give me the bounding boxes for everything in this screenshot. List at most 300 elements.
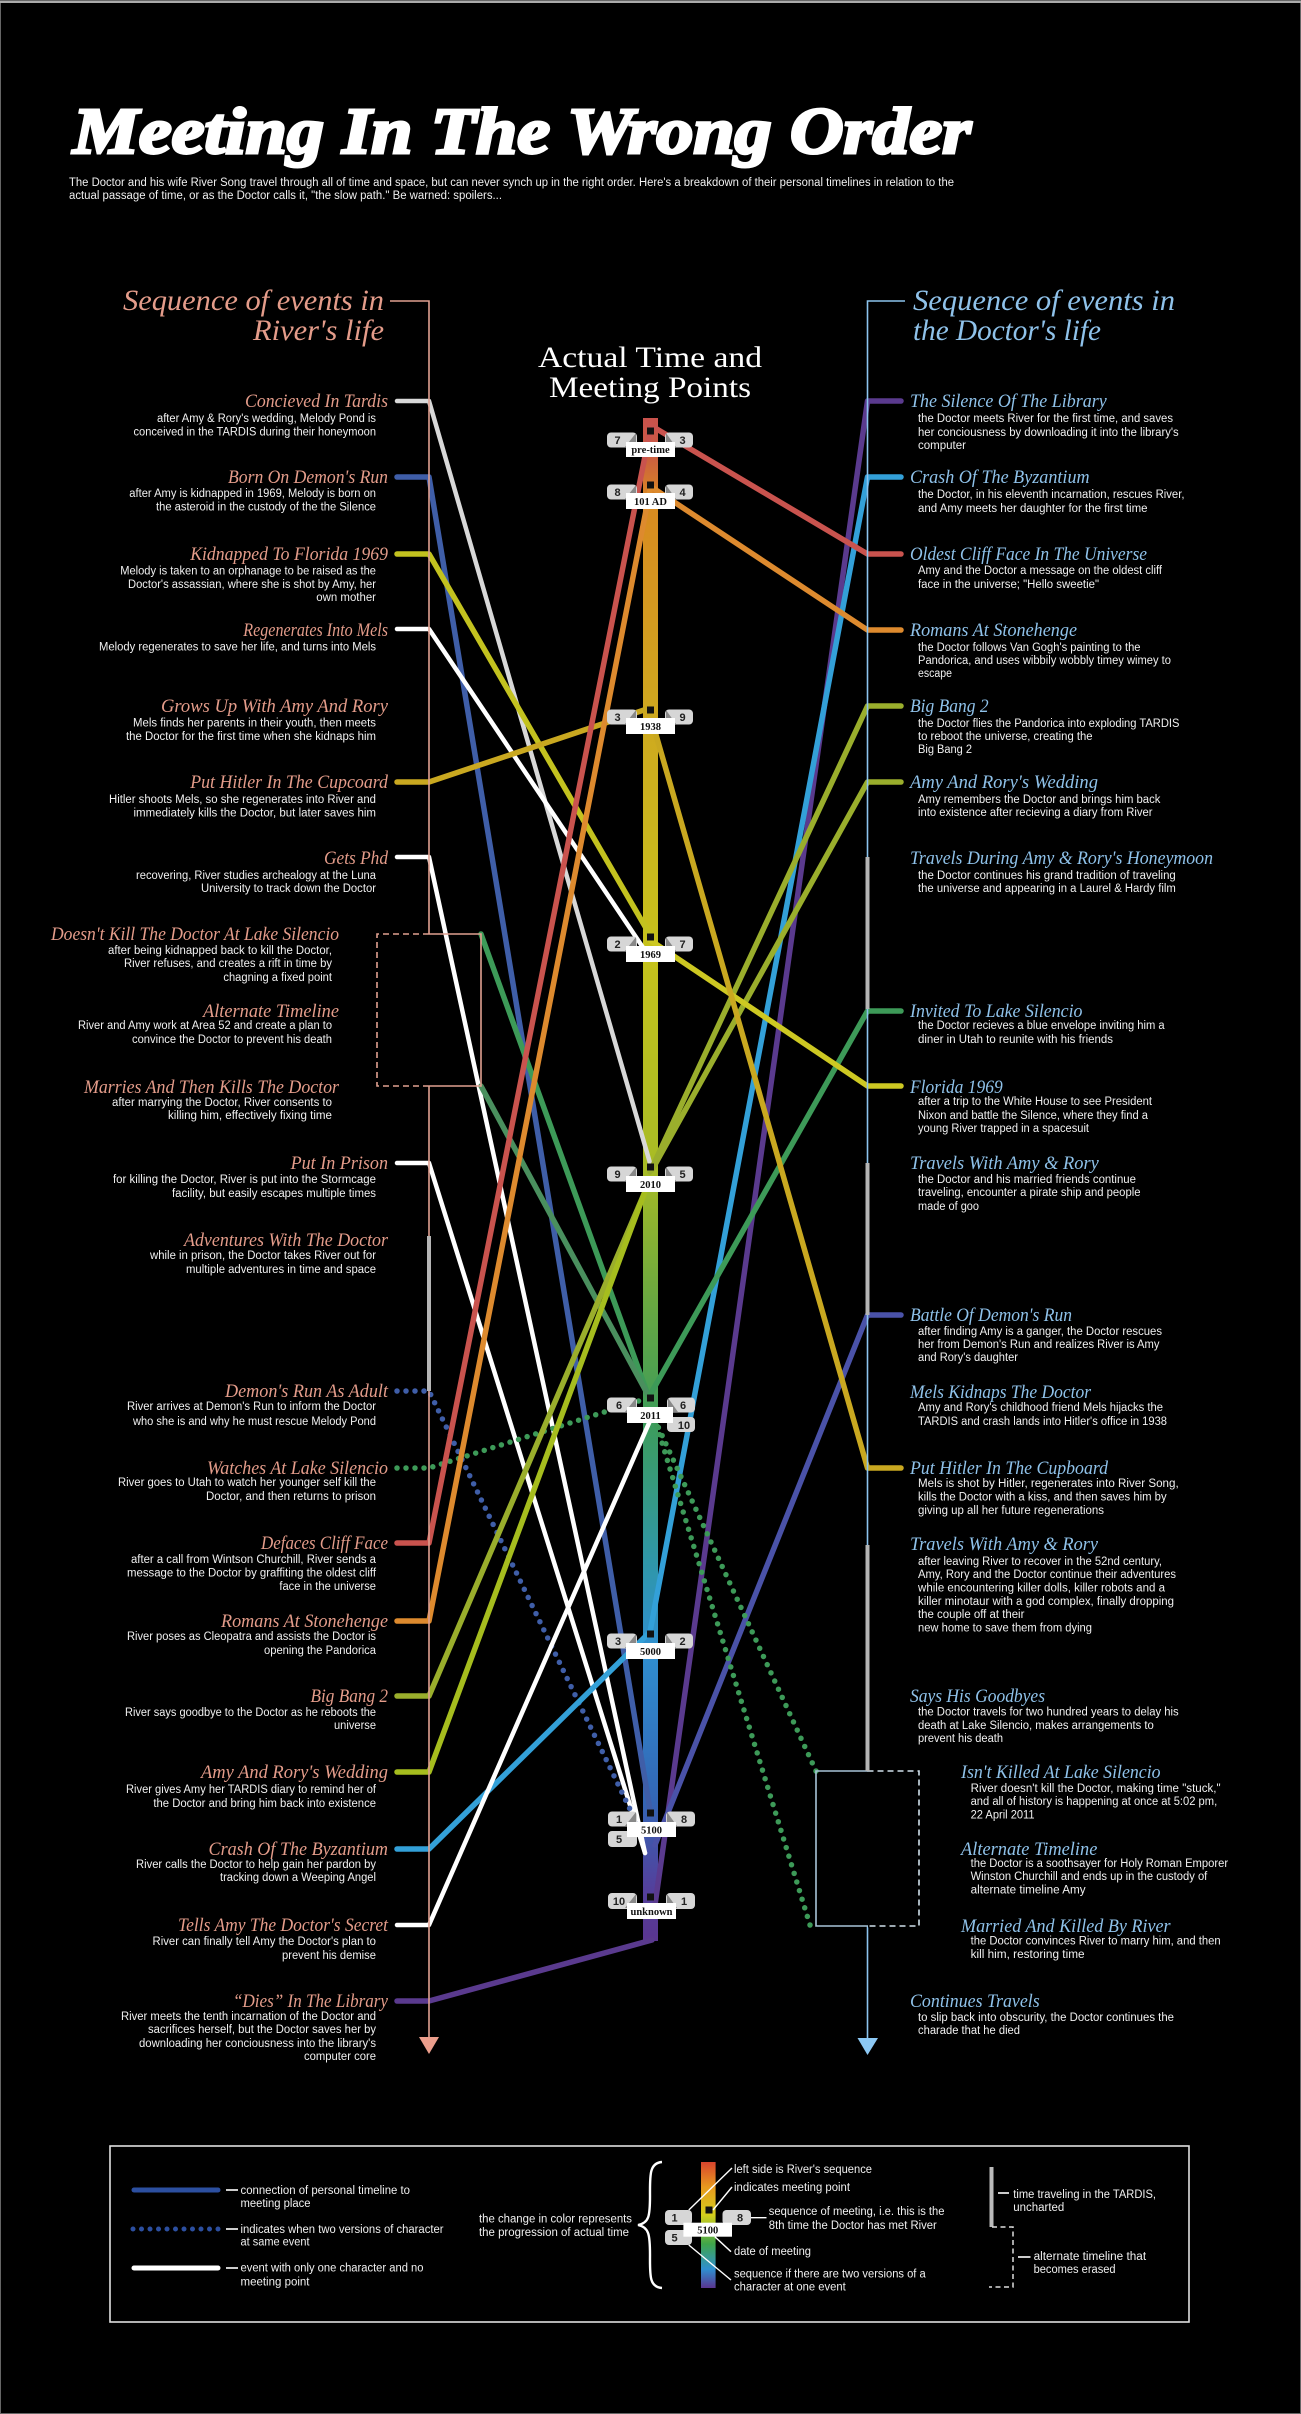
event: Oldest Cliff Face: Amy and the Doctor a message on the oldest cliff [918,565,1163,577]
event: Kidnapped To Florida 1969: Doctor's assassian, where she is shot by Amy, her [128,579,376,591]
heading: River's life: Sequence of events in [123,284,384,317]
event: Adventures With The Doctor [149,1230,389,1276]
event: Kidnapped To Florida 1969: Kidnapped To Florida 1969 [189,544,388,565]
event: Demon's Run As Adult: River arrives at Demon's Run to inform the Doctor [127,1401,376,1413]
panel: legend [110,2146,1189,2322]
heading: actual time: Meeting Points [549,371,751,404]
event: Watches At Lake Silencio: Doctor, and then returns to prison [206,1491,376,1503]
legend: callout texts: left side is River's sequence [734,2164,872,2176]
event: Crash Of The Byzantium (River): Crash Of The Byzantium [208,1839,388,1860]
event: Travels With Amy & Rory 2: Travels With Amy & Rory [910,1534,1099,1555]
legend: connection line: meeting place [240,2198,310,2210]
line: Wedding (River) [397,1178,650,1772]
event: Put In Prison [113,1153,388,1200]
event: Travels With Amy & Rory 2: new home to save them from dying [918,1622,1092,1634]
event: Big Bang 2 (Doctor): to reboot the universe, creating the [918,731,1093,743]
event: Kidnapped To Florida 1969: Melody is taken to an orphanage to be raised as the [120,566,376,578]
event: Tells Amy The Doctor's Secret [152,1915,389,1962]
line: Romans (Doctor) [650,486,901,630]
legend: TARDIS time travel and alternate timeline: time traveling in the TARDIS, [1013,2189,1156,2201]
event: Romans At Stonehenge (Doctor): escape [918,668,952,680]
Doctor timeline spine [816,301,920,2055]
event: Travels With Amy & Rory 1: Travels With Amy & Rory [910,1153,1099,1174]
heading: River's life [123,284,384,347]
event: Tells Amy The Doctor's Secret: prevent his demise [282,1950,376,1962]
event: Big Bang 2 (River): universe [334,1720,376,1732]
event: Put Hitler In The Cupboard: Put Hitler In The Cupboard [909,1458,1108,1479]
event: Alternate Timeline (Doctor): alternate timeline Amy [971,1884,1086,1896]
event: Adventures With The Doctor: multiple adventures in time and space [186,1264,376,1276]
event: Alternate Timeline (Doctor): Alternate Timeline [959,1839,1097,1860]
event: Oldest Cliff Face: face in the universe; "Hello sweetie" [918,579,1099,591]
line: Dies In The Library [397,1940,652,2001]
legend: connection line [134,2185,410,2210]
event: Crash Of The Byzantium (River): tracking down a Weeping Angel [220,1872,376,1884]
node: pre-time [607,428,693,457]
event: Isn't Killed At Lake Silencio: Isn't Killed At Lake Silencio [960,1762,1161,1783]
line: Wedding (Doctor) [652,782,901,1170]
line: Battle Of Demon's Run [655,1315,901,1845]
event: Doesn't Kill The Doctor: after being kidnapped back to kill the Doctor, [108,945,332,957]
node: 5000: 2 [679,1636,686,1648]
node: 2011: 10 [678,1420,690,1432]
event: Travels With Amy & Rory 1: made of goo [918,1201,979,1213]
node: 5000: 3 [615,1636,621,1648]
line: Doesn't Kill [481,934,648,1395]
event: Kidnapped To Florida 1969: own mother [316,592,376,604]
event: Says His Goodbyes: prevent his death [918,1733,1003,1745]
node: 2011 [607,1394,695,1432]
node: 2011: 6 [616,1400,622,1412]
event: Alternate Timeline (River) [78,1001,339,1046]
event: Put In Prison: Put In Prison [290,1153,388,1174]
Doctor events [908,391,1228,2037]
node: 1938: 3 [614,712,621,724]
event: Adventures With The Doctor: while in prison, the Doctor takes River out for [149,1250,376,1262]
event: Concieved In Tardis: Concieved In Tardis [245,391,388,412]
event: The Silence Of The Library: computer [918,440,966,452]
event: Dies In The Library: River meets the tenth incarnation of the Doctor and [121,2011,376,2023]
event: Put Hitler In The Cupcoard [109,772,388,820]
legend: TARDIS time travel and alternate timeline [989,2167,1156,2287]
event: Put Hitler In The Cupboard: giving up all her future regenerations [918,1505,1104,1517]
event: Florida 1969: Florida 1969 [909,1077,1003,1098]
event: Dies In The Library: computer core [304,2051,376,2063]
node: 5100 [608,1810,695,1847]
legend: callout lines [689,2168,766,2280]
line: Put In Prison [397,1163,645,1853]
legend: TARDIS time travel and alternate timeline: becomes erased [1034,2264,1116,2276]
event: Says His Goodbyes: the Doctor travels for two hundred years to delay his [918,1706,1179,1718]
node: 5100: 8 [681,1814,687,1826]
event: Battle Of Demon's Run: Battle Of Demon's Run [910,1305,1072,1326]
event: Doesn't Kill The Doctor [50,924,339,984]
event: Big Bang 2 (Doctor): Big Bang 2 [910,696,989,717]
intro text [69,177,954,202]
event: Marries And Then Kills: after marrying the Doctor, River consents to [112,1097,332,1109]
node: 1969 [607,934,693,962]
event: Oldest Cliff Face: Oldest Cliff Face In The Universe [910,544,1147,565]
event: Romans At Stonehenge (Doctor): Romans At Stonehenge [909,620,1077,641]
legend: sample time bar: 1 [672,2212,678,2224]
legend: dotted line: at same event [240,2237,310,2249]
event: Crash Of The Byzantium (Doctor): Crash Of The Byzantium [910,467,1090,488]
event: Dies In The Library [121,1991,389,2063]
event: Battle Of Demon's Run: her from Demon's Run and realizes River is Amy [918,1339,1160,1351]
node: 2010 [607,1164,693,1192]
legend: callout texts: indicates meeting point [734,2182,851,2194]
event: Mels Kidnaps The Doctor: TARDIS and crash lands into Hitler's office in 1938 [918,1416,1167,1428]
event: Concieved In Tardis: after Amy & Rory's wedding, Melody Pond is [157,413,376,425]
line: Marries [481,1086,648,1395]
event: Concieved In Tardis [134,391,388,438]
event: Romans At Stonehenge (Doctor): Pandorica, and uses wibbily wobbly timey wimey to [918,655,1171,667]
event: Grows Up With Amy And Rory [126,696,389,743]
node: 1938 [607,706,693,734]
River events [50,391,389,2063]
line: Florida 1969 [650,940,901,1086]
legend: colour progression note: the progression of actual time [479,2227,629,2239]
node: pre-time: 7 [614,435,621,447]
event: Big Bang 2 (Doctor): Big Bang 2 [918,744,972,756]
node: 2011: 2011 [640,1411,661,1422]
event: Travels With Amy & Rory 2: Amy, Rory and the Doctor continue their adventures [918,1569,1176,1581]
central time bar [643,418,658,1941]
event: Alternate Timeline (River): Alternate Timeline [201,1001,339,1022]
event: Demon's Run As Adult: who she is and why he must rescue Melody Pond [132,1416,376,1428]
event: Travels With Amy & Rory 1: the Doctor and his married friends continue [918,1174,1136,1186]
legend: callout texts: sequence if there are two versions of a [734,2268,926,2280]
event: Crash Of The Byzantium (River): River calls the Doctor to help gain her pardon by [136,1859,376,1871]
event: Put Hitler In The Cupcoard: Hitler shoots Mels, so she regenerates into River and [109,794,376,806]
event: Invited To Lake Silencio: diner in Utah to reunite with his friends [918,1034,1113,1046]
legend: dotted line: indicates when two versions of character [240,2224,444,2236]
event: Married And Killed By River: Married And Killed By River [960,1916,1171,1937]
line: Watches At Lake Silencio [397,1399,645,1468]
event: Crash Of The Byzantium (River) [136,1839,388,1884]
legend: white line: meeting point [240,2277,310,2289]
line: Big Bang 2 (River) [397,1180,650,1696]
event: Isn't Killed At Lake Silencio: 22 April 2011 [971,1810,1035,1822]
node: unknown: 10 [613,1896,625,1908]
line: Demon's Run As Adult [397,1391,640,1830]
event: Demon's Run As Adult [127,1381,389,1428]
event: Put Hitler In The Cupboard [909,1458,1179,1517]
event: Crash Of The Byzantium (Doctor) [910,467,1184,515]
event: The Silence Of The Library: The Silence Of The Library [910,391,1107,412]
event: Invited To Lake Silencio: Invited To Lake Silencio [909,1001,1082,1022]
event: Alternate Timeline (Doctor): Winston Churchill and ends up in the custody of [971,1871,1208,1883]
event: Amy And Rory's Wedding (Doctor): into existence after recieving a diary from River [918,807,1153,819]
line: Invited To Lake Silencio [650,1011,901,1395]
event: Battle Of Demon's Run: and Rory's daughter [918,1352,1018,1364]
node: unknown: 1 [681,1896,687,1908]
event: Amy And Rory's Wedding (River): Amy And Rory's Wedding [199,1762,388,1783]
node: 101 AD: 101 AD [634,497,667,508]
event: Big Bang 2 (Doctor): the Doctor flies the Pandorica into exploding TARDIS [918,718,1180,730]
event: Travels During Honeymoon: Travels During Amy & Rory's Honeymoon [910,848,1213,869]
event: Put Hitler In The Cupboard: kills the Doctor with a kiss, and then saves him by [918,1492,1167,1504]
line: Tells Amy [397,1414,653,1925]
line: Crash (Doctor) [650,477,901,1632]
event: Defaces Cliff Face: after a call from Wintson Churchill, River sends a [131,1554,377,1566]
line: Silence Of The Library [655,401,901,1905]
event: Travels With Amy & Rory 2 [910,1534,1176,1634]
event: Big Bang 2 (River): River says goodbye to the Doctor as he reboots the [125,1707,376,1719]
node: 5000: 5000 [640,1647,661,1658]
event: Gets Phd: recovering, River studies archealogy at the Luna [136,870,377,882]
legend: sample time bar: 8 [737,2212,743,2224]
event: Travels During Honeymoon: the universe and appearing in a Laurel & Hardy film [918,883,1176,895]
event: Continues Travels: Continues Travels [910,1991,1040,2012]
line: Isn't Killed dotted [655,1420,816,1771]
event: Crash Of The Byzantium (Doctor): and Amy meets her daughter for the first time [918,503,1148,515]
line: Born On Demon's Run [397,477,650,1810]
event: Regenerates Into Mels: Melody regenerates to save her life, and turns into Mels [99,642,376,654]
event: The Silence Of The Library [910,391,1179,452]
event: Dies In The Library: sacrifices herself, but the Doctor saves her by [148,2024,376,2036]
event: Grows Up With Amy And Rory: Mels finds her parents in their youth, then meets [133,718,376,730]
event: Put Hitler In The Cupboard: Mels is shot by Hitler, regenerates into River Song, [918,1478,1179,1490]
node: 1938: 9 [679,712,686,724]
event: Romans At Stonehenge (Doctor) [909,620,1171,680]
legend: dotted line [133,2224,444,2249]
event: Put In Prison: facility, but easily escapes multiple times [172,1188,376,1200]
event: Put Hitler In The Cupcoard: immediately kills the Doctor, but later saves him [134,808,376,820]
event: Defaces Cliff Face: Defaces Cliff Face [260,1533,388,1554]
node: 1969: 7 [679,939,686,951]
event: Continues Travels: charade that he died [918,2025,1020,2037]
arrow: River timeline [419,2037,439,2054]
node: pre-time: 3 [679,435,686,447]
event: Florida 1969: young River trapped in a spacesuit [918,1123,1090,1135]
event: Travels With Amy & Rory 2: killer minotaur with a god complex, finally dropping [918,1596,1174,1608]
legend: sample time bar [665,2162,751,2288]
line: Oldest Cliff Face [650,425,901,554]
line: Concieved In Tardis [397,401,650,1163]
event: Doesn't Kill The Doctor: chagning a fixed point [223,972,333,984]
event: Big Bang 2 (River) [125,1686,388,1732]
event: Romans At Stonehenge (River): Romans At Stonehenge [220,1611,388,1632]
event: Put Hitler In The Cupcoard: Put Hitler In The Cupcoard [189,772,388,793]
event: Travels With Amy & Rory 2: the couple off at their [918,1609,1025,1621]
event: Big Bang 2 (River): Big Bang 2 [310,1686,388,1707]
event: Amy And Rory's Wedding (River): the Doctor and bring him back into existence [153,1798,376,1810]
event: Invited To Lake Silencio [909,1001,1165,1046]
legend: colour progression note [479,2214,632,2239]
node: 101 AD [607,482,693,509]
node: 5100: 5100 [641,1826,662,1836]
event: Amy And Rory's Wedding (Doctor) [908,772,1161,819]
event: Mels Kidnaps The Doctor: Amy and Rory's childhood friend Mels hijacks the [918,1402,1163,1414]
event: Marries And Then Kills: killing him, effectively fixing time [168,1110,332,1122]
event: Watches At Lake Silencio: River goes to Utah to watch her younger self kill the [118,1477,376,1489]
line: Crash (River) [397,1632,650,1849]
event: Married And Killed By River: the Doctor convinces River to marry him, and then [971,1936,1221,1948]
event: Born On Demon's Run: after Amy is kidnapped in 1969, Melody is born on [129,488,376,500]
event: Isn't Killed At Lake Silencio [960,1762,1221,1822]
event: Watches At Lake Silencio: Watches At Lake Silencio [207,1458,388,1479]
node: 2011: 6 [680,1400,686,1412]
event: Born On Demon's Run [129,467,388,514]
node: 1969: 2 [614,939,621,951]
event: Says His Goodbyes: Says His Goodbyes [910,1686,1045,1707]
intro text: actual passage of time, or as the Doctor calls it, "the slow path." Be warned: spoilers... [69,190,502,202]
event: Grows Up With Amy And Rory: Grows Up With Amy And Rory [161,696,389,717]
event: Crash Of The Byzantium (Doctor): the Doctor, in his eleventh incarnation, rescues River, [918,489,1184,501]
event: Amy And Rory's Wedding (Doctor): Amy remembers the Doctor and brings him back [918,794,1161,806]
line: Gets Phd [397,857,645,1853]
node: 5000 [607,1630,693,1659]
event: Defaces Cliff Face: message to the Doctor by graffiting the oldest cliff [127,1568,377,1580]
legend: callout texts: 8th time the Doctor has met River [769,2220,937,2232]
legend: TARDIS time travel and alternate timeline: uncharted [1013,2202,1064,2214]
event: Dies In The Library: downloading her conciousness into the library's [139,2038,376,2050]
event: Married And Killed By River: kill him, restoring time [971,1949,1085,1961]
line: Put Hitler (River) [397,708,650,782]
event: Doesn't Kill The Doctor: Doesn't Kill The Doctor At Lake Silencio [50,924,339,945]
title: Meeting In The Wrong Order [72,95,972,168]
intro text: The Doctor and his wife River Song travel through all of time and space, but can never synch up in the right order. Here's a breakdown of their personal timelines in relation to the [69,177,954,189]
event: Regenerates Into Mels: Regenerates Into Mels [242,620,388,641]
node: 2010: 9 [614,1169,621,1181]
heading: actual time [538,341,762,404]
event: Alternate Timeline (Doctor): the Doctor is a soothsayer for Holy Roman Emporer [971,1858,1228,1870]
event: Adventures With The Doctor: Adventures With The Doctor [182,1230,389,1251]
event: Battle Of Demon's Run [910,1305,1162,1364]
event: Doesn't Kill The Doctor: River refuses, and creates a rift in time by [124,958,332,970]
node: 101 AD: 8 [614,487,621,499]
event: Born On Demon's Run: Born On Demon's Run [228,467,388,488]
event: Dies In The Library: “Dies” In The Library [233,1991,389,2012]
event: Oldest Cliff Face [910,544,1163,591]
event: Travels With Amy & Rory 2: after leaving River to recover in the 52nd century, [918,1556,1162,1568]
node: 1938: 1938 [640,722,661,733]
legend: callout texts [734,2164,944,2294]
node: 2010: 2010 [640,1180,661,1191]
event: Demon's Run As Adult: Demon's Run As Adult [224,1381,389,1402]
node: 1969: 1969 [640,950,661,961]
event: Amy And Rory's Wedding (Doctor): Amy And Rory's Wedding [908,772,1098,793]
heading: Doctor's life: Sequence of events in [913,284,1175,317]
event: Defaces Cliff Face [127,1533,388,1593]
line: Big Bang 2 (Doctor) [650,706,901,1172]
legend: brace [638,2162,662,2288]
event: Isn't Killed At Lake Silencio: and all of history is happening at once at 5:02 pm, [971,1796,1217,1808]
legend: sample time bar: 5100 [697,2226,718,2236]
River timeline spine [377,301,481,2054]
event: Defaces Cliff Face: face in the universe [279,1581,376,1593]
event: Regenerates Into Mels [99,620,388,654]
event: Alternate Timeline (Doctor) [959,1839,1228,1896]
event: Florida 1969: after a trip to the White House to see President [918,1096,1153,1108]
event: Romans At Stonehenge (Doctor): the Doctor follows Van Gogh's painting to the [918,642,1140,654]
event: Amy And Rory's Wedding (River) [126,1762,388,1810]
event: Romans At Stonehenge (River): River poses as Cleopatra and assists the Doctor is [127,1631,376,1643]
event: Gets Phd [136,848,388,895]
event: Mels Kidnaps The Doctor: Mels Kidnaps The Doctor [909,1382,1092,1403]
event: Florida 1969: Nixon and battle the Silence, where they find a [918,1110,1149,1122]
heading: actual time: Actual Time and [538,341,762,374]
legend: callout texts: date of meeting [734,2246,811,2258]
event: Invited To Lake Silencio: the Doctor recieves a blue envelope inviting him a [918,1020,1165,1032]
event: Continues Travels: to slip back into obscurity, the Doctor continues the [918,2012,1174,2024]
line: Married And Killed dotted [655,1420,810,1925]
heading: River's life: River's life [252,314,384,347]
node: 5100: 5 [616,1834,622,1846]
event: Put In Prison: for killing the Doctor, River is put into the Stormcage [113,1174,376,1186]
event: Continues Travels [910,1991,1174,2037]
legend: callout texts: sequence of meeting, i.e. this is the [769,2206,944,2218]
line: Romans (River) [397,490,650,1621]
legend: sample time bar: 5 [672,2232,678,2244]
event: The Silence Of The Library: the Doctor meets River for the first time, and saves [918,413,1173,425]
event: Travels With Amy & Rory 1 [910,1153,1140,1213]
event: Alternate Timeline (River): River and Amy work at Area 52 and create a plan to [78,1020,332,1032]
event: Gets Phd: Gets Phd [324,848,388,869]
node: 2010: 5 [679,1169,686,1181]
heading: Doctor's life: the Doctor's life [913,314,1101,347]
event: Romans At Stonehenge (River) [127,1611,388,1657]
event: Marries And Then Kills: Marries And Then Kills The Doctor [83,1077,340,1098]
event: Alternate Timeline (River): convince the Doctor to prevent his death [132,1034,332,1046]
legend: connection line: connection of personal timeline to [240,2185,410,2197]
node: unknown [608,1893,695,1919]
event: Amy And Rory's Wedding (River): River gives Amy her TARDIS diary to remind her of [126,1784,377,1796]
event: Big Bang 2 (Doctor) [910,696,1180,756]
event: Battle Of Demon's Run: after finding Amy is a ganger, the Doctor rescues [918,1326,1162,1338]
event: Travels With Amy & Rory 2: while encountering killer dolls, killer robots and a [917,1583,1166,1595]
event: Married And Killed By River [960,1916,1221,1961]
node: 5100: 1 [616,1814,622,1826]
event: Tells Amy The Doctor's Secret: Tells Amy The Doctor's Secret [178,1915,389,1936]
line: Defaces Cliff Face [397,431,650,1543]
legend: colour progression note: the change in color represents [479,2214,632,2226]
legend: callout texts: character at one event [734,2282,846,2294]
event: Kidnapped To Florida 1969 [120,544,388,604]
event: Travels During Honeymoon: the Doctor continues his grand tradition of traveling [918,870,1176,882]
event: Romans At Stonehenge (River): opening the Pandorica [264,1645,377,1657]
event: Born On Demon's Run: the asteroid in the custody of the the Silence [156,502,376,514]
node: 101 AD: 4 [679,487,686,499]
line: Kidnapped To Florida [397,554,650,935]
line: Put Hitler (Doctor) [650,714,901,1468]
event: Says His Goodbyes [910,1686,1179,1745]
meeting points [607,428,695,1919]
event: Mels Kidnaps The Doctor [909,1382,1167,1428]
event: Grows Up With Amy And Rory: the Doctor for the first time when she kidnaps him [126,731,376,743]
event: Concieved In Tardis: conceived in the TARDIS during their honeymoon [134,426,376,438]
node: unknown: unknown [630,1907,673,1918]
event: Isn't Killed At Lake Silencio: River doesn't kill the Doctor, making time "stuck," [971,1783,1221,1795]
event: Says His Goodbyes: death at Lake Silencio, makes arrangements to [918,1720,1154,1732]
event: Travels With Amy & Rory 1: traveling, encounter a pirate ship and people [918,1187,1140,1199]
legend: white line [134,2263,424,2289]
legend: TARDIS time travel and alternate timeline: alternate timeline that [1034,2251,1147,2263]
line: Regenerates Into Mels [397,629,648,955]
event: The Silence Of The Library: her conciousness by downloading it into the library's [918,427,1179,439]
connection lines [397,401,901,2001]
node: pre-time: pre-time [631,445,670,456]
heading: Doctor's life [913,284,1175,347]
event: Watches At Lake Silencio [118,1458,388,1503]
event: Marries And Then Kills [83,1077,340,1122]
event: Florida 1969 [909,1077,1153,1135]
event: Tells Amy The Doctor's Secret: River can finally tell Amy the Doctor's plan to [152,1936,376,1948]
legend: white line: event with only one character and no [240,2263,424,2275]
event: Gets Phd: University to track down the Doctor [201,883,376,895]
event: Travels During Honeymoon [910,848,1213,895]
